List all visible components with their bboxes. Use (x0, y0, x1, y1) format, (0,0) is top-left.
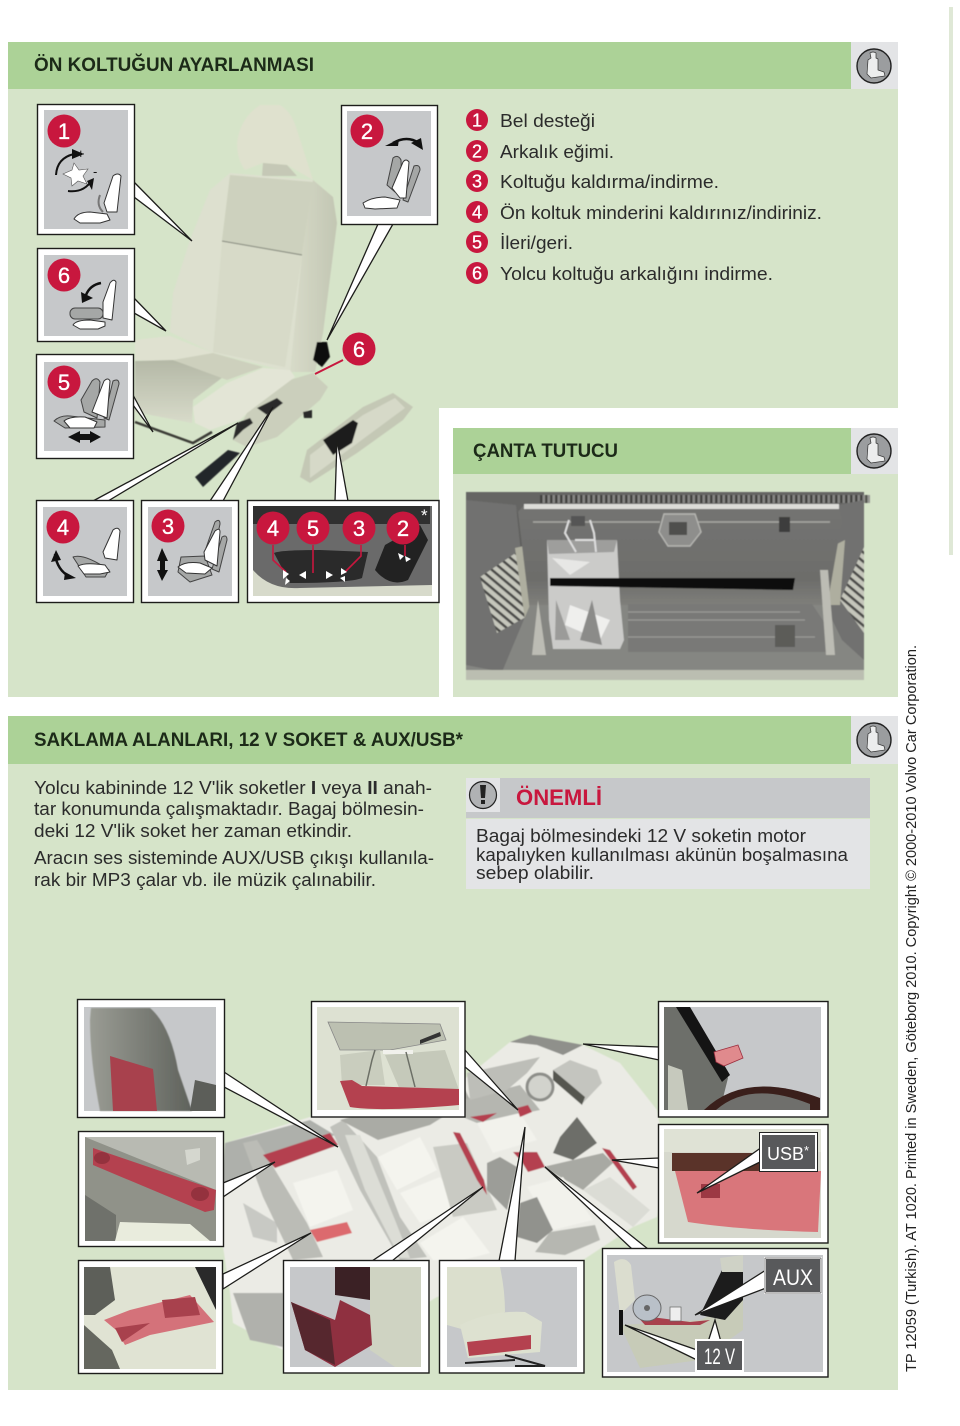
thumbnail 1: lumbar support (38, 104, 134, 234)
heading: storage (8, 716, 898, 764)
thumbnail: front door pocket (312, 1002, 465, 1117)
seat illustration (135, 105, 413, 487)
thumbnail: rear door pocket (78, 1132, 224, 1246)
heading: storage: SAKLAMA ALANLARI, 12 V SOKET & AUX/USB* (34, 730, 464, 751)
thumbnail: combined switch panel: 2 (397, 516, 409, 541)
list: seat adjustment legend: 5 (472, 232, 482, 252)
callout: important: sebep olabilir. (476, 862, 594, 883)
thumbnail 1: lumbar support: + (77, 146, 85, 161)
thumbnail 4: cushion tilt (36, 500, 134, 602)
red label 6 on seat: 6 (353, 337, 365, 362)
callout: important: kapalıyken kullanılması akünün boşalmasına (476, 844, 849, 865)
text block: sockets: rak bir MP3 çalar vb. ile müzik çalınabilir. (34, 869, 376, 890)
list: seat adjustment legend: 1 (472, 110, 482, 130)
thumbnail 5: forward backward: 5 (58, 370, 70, 395)
thumbnail 4: cushion tilt: 4 (57, 515, 69, 540)
list: seat adjustment legend: 6 (472, 264, 482, 284)
thumbnail 6: fold passenger backrest (38, 248, 134, 342)
car interior cutaway (222, 1035, 667, 1350)
callout pointers (93, 182, 393, 501)
heading: front seat adjustment: ÖN KOLTUĞUN AYARLANMASI (34, 54, 314, 76)
text block: sockets: deki 12 V'lik soket her zaman etkindir. (34, 820, 352, 841)
list: seat adjustment legend: 2 (472, 142, 482, 162)
thumbnail 3: seat height: 3 (162, 514, 174, 539)
label: AUX: AUX (773, 1265, 813, 1290)
thumbnail: glove compartment with USB (658, 1124, 828, 1243)
heading: bag holder: ÇANTA TUTUCU (473, 441, 618, 462)
list: seat adjustment legend: 4 (472, 202, 482, 222)
thumbnail 1: lumbar support: 1 (58, 119, 70, 144)
label: USB: USB (767, 1144, 804, 1164)
thumbnail: combined switch panel (248, 500, 439, 602)
label: 12 V (696, 1340, 743, 1371)
list: seat adjustment legend: Ön koltuk minderini kaldırınız/indiriniz. (500, 202, 822, 223)
list: seat adjustment legend: 3 (472, 172, 482, 192)
callout: important: ÖNEMLİ (516, 785, 602, 810)
red zones (263, 1133, 338, 1168)
icon: seat badge top (857, 49, 891, 83)
thumbnail: seat back pocket (78, 1000, 224, 1118)
thumbnail 5: forward backward (36, 354, 134, 458)
thumbnail: combined switch panel: * (421, 506, 428, 525)
callout: important: Bagaj bölmesindeki 12 V soketin motor (476, 825, 806, 846)
thumbnail: parking ticket holder (658, 1002, 828, 1117)
thumbnail 2: backrest tilt (342, 106, 438, 224)
label: AUX (765, 1258, 821, 1293)
label: USB: * (804, 1143, 809, 1158)
list: seat adjustment legend: Koltuğu kaldırma/indirme. (500, 171, 719, 192)
thumbnail: combined switch panel: 5 (307, 516, 319, 541)
panel: front seat adjustment (8, 42, 898, 697)
thumbnail 1: lumbar support: - (93, 164, 97, 179)
copyright vertical text: TP 12059 (Turkish). AT 1020. Printed in Sweden, Göteborg 2010. Copyright © 2000-2010 Volvo Car Corporation. (903, 645, 920, 1372)
red label 6 on seat (315, 332, 376, 374)
photo: luggage compartment with bag (466, 492, 870, 680)
thumbnail 6: fold passenger backrest: 6 (58, 263, 70, 288)
panel: storage, 12V socket and AUX/USB (8, 716, 898, 1390)
icon: seat badge middle (857, 434, 891, 468)
callout pointers lower (223, 1044, 659, 1289)
thumbnail: center console with AUX and 12V (602, 1248, 828, 1377)
thumbnail 3: seat height (142, 500, 238, 602)
text block: sockets: Aracın ses sisteminde AUX/USB çıkışı kullanıla- (34, 847, 434, 868)
thumbnail: combined switch panel: 3 (353, 516, 365, 541)
console side panel (300, 393, 413, 483)
list: seat adjustment legend: Yolcu koltuğu arkalığını indirme. (500, 263, 773, 284)
label: 12 V: 12 V (704, 1344, 735, 1369)
list: seat adjustment legend: Arkalık eğimi. (500, 141, 614, 162)
text block: sockets: tar konumunda çalışmaktadır. Bagaj bölmesin- (34, 798, 424, 819)
thumbnail: front seat drawer (440, 1260, 584, 1373)
thumbnail 2: backrest tilt: 2 (361, 119, 373, 144)
thumbnail: rear center console (78, 1260, 222, 1374)
right edge strip (949, 7, 953, 555)
thumbnail: combined switch panel: 4 (267, 516, 279, 541)
heading: bag holder (453, 428, 898, 474)
thumbnail: center console rear cup holder (284, 1260, 429, 1373)
callout: important (466, 778, 870, 889)
text block: sockets: Yolcu kabininde 12 V'lik soketler I veya II anah- (34, 777, 432, 798)
icon: seat badge lower (857, 723, 891, 757)
label: USB (760, 1132, 818, 1172)
panel: bag holder (453, 428, 898, 697)
heading: front seat adjustment (8, 42, 898, 89)
list: seat adjustment legend: İleri/geri. (500, 232, 573, 253)
list: seat adjustment legend: Bel desteği (500, 110, 595, 131)
text block: sockets (34, 777, 434, 890)
list: seat adjustment legend (466, 109, 822, 284)
